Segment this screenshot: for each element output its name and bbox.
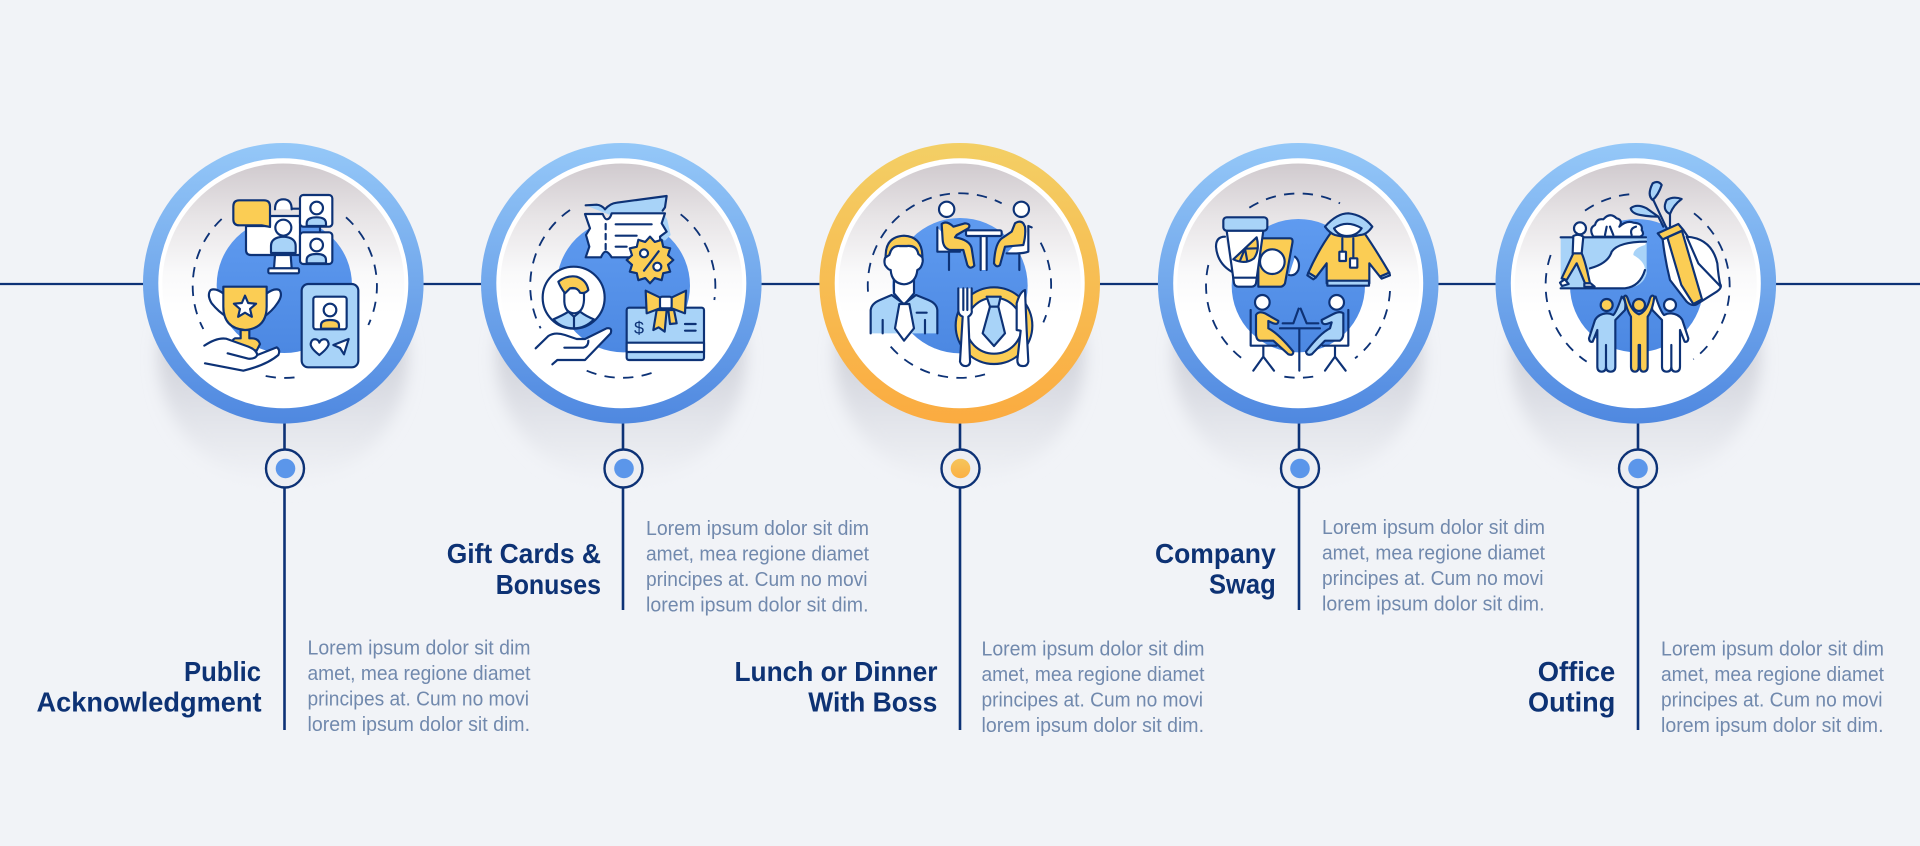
description: Lorem ipsum dolor sit dim (1322, 517, 1545, 539)
heading: Public (184, 656, 261, 687)
description (982, 638, 1205, 737)
icon: lunch with boss (868, 193, 1051, 378)
description: lorem ipsum dolor sit dim. (646, 594, 868, 616)
heading: Gift Cards & (447, 538, 601, 569)
drop shadow (1512, 236, 1760, 484)
description: Lorem ipsum dolor sit dim (1661, 638, 1884, 660)
description: amet, mea regione diamet (982, 664, 1205, 686)
panel: company swag (1155, 143, 1545, 615)
connector stem (283, 420, 286, 730)
description: amet, mea regione diamet (646, 544, 869, 566)
heading: Bonuses (496, 569, 601, 600)
circle ring (481, 143, 762, 424)
panel: gift cards and bonuses (447, 143, 869, 616)
description: lorem ipsum dolor sit dim. (1322, 594, 1544, 616)
connector stem (959, 420, 961, 730)
timeline axis (0, 283, 1920, 285)
description (308, 638, 531, 736)
circle ring (1496, 143, 1776, 424)
description: Lorem ipsum dolor sit dim (308, 638, 530, 660)
drop shadow (836, 236, 1084, 484)
description: Lorem ipsum dolor sit dim (646, 518, 869, 540)
description: lorem ipsum dolor sit dim. (982, 715, 1204, 737)
heading (1155, 538, 1276, 600)
heading (1528, 656, 1615, 718)
drop shadow (159, 236, 407, 484)
timeline marker (1281, 450, 1319, 488)
description: Lorem ipsum dolor sit dim (982, 638, 1204, 660)
description: principes at. Cum no movi (1661, 690, 1882, 712)
icon: office outing (1546, 182, 1730, 372)
heading: With Boss (808, 686, 937, 718)
heading: Acknowledgment (36, 686, 262, 718)
connector stem (1637, 420, 1639, 730)
connector stem (622, 420, 624, 610)
circle ring (819, 143, 1100, 424)
icon: company swag (1206, 193, 1390, 378)
description: principes at. Cum no movi (1322, 568, 1544, 590)
timeline marker (1619, 450, 1657, 488)
description: lorem ipsum dolor sit dim. (308, 714, 530, 736)
heading: Office (1538, 656, 1615, 687)
drop shadow (1174, 236, 1422, 484)
heading (36, 656, 262, 718)
description (1661, 638, 1884, 737)
heading (734, 656, 938, 718)
icon: recognition (193, 195, 377, 378)
icon: gift cards: $ (634, 318, 644, 338)
description: amet, mea regione diamet (1661, 664, 1884, 686)
timeline marker (266, 450, 304, 488)
timeline marker (942, 450, 980, 488)
description: principes at. Cum no movi (646, 569, 868, 591)
description (1322, 517, 1545, 616)
drop shadow (497, 236, 745, 484)
connector stem (1298, 420, 1300, 610)
description: principes at. Cum no movi (308, 688, 529, 710)
circle ring (143, 143, 424, 424)
heading: Swag (1209, 568, 1276, 600)
heading: Company (1155, 538, 1276, 569)
panel: public acknowledgment (36, 143, 531, 736)
timeline marker (604, 450, 642, 488)
description (646, 518, 869, 616)
description: amet, mea regione diamet (308, 663, 531, 685)
description: lorem ipsum dolor sit dim. (1661, 715, 1884, 737)
description: amet, mea regione diamet (1322, 542, 1545, 564)
circle ring (1158, 143, 1438, 424)
description: principes at. Cum no movi (982, 690, 1203, 712)
heading (447, 538, 601, 600)
panel: lunch or dinner with boss (734, 143, 1205, 737)
heading: Lunch or Dinner (734, 656, 938, 687)
icon: gift cards (530, 196, 715, 378)
heading: Outing (1528, 686, 1615, 718)
panel: office outing (1496, 143, 1884, 737)
